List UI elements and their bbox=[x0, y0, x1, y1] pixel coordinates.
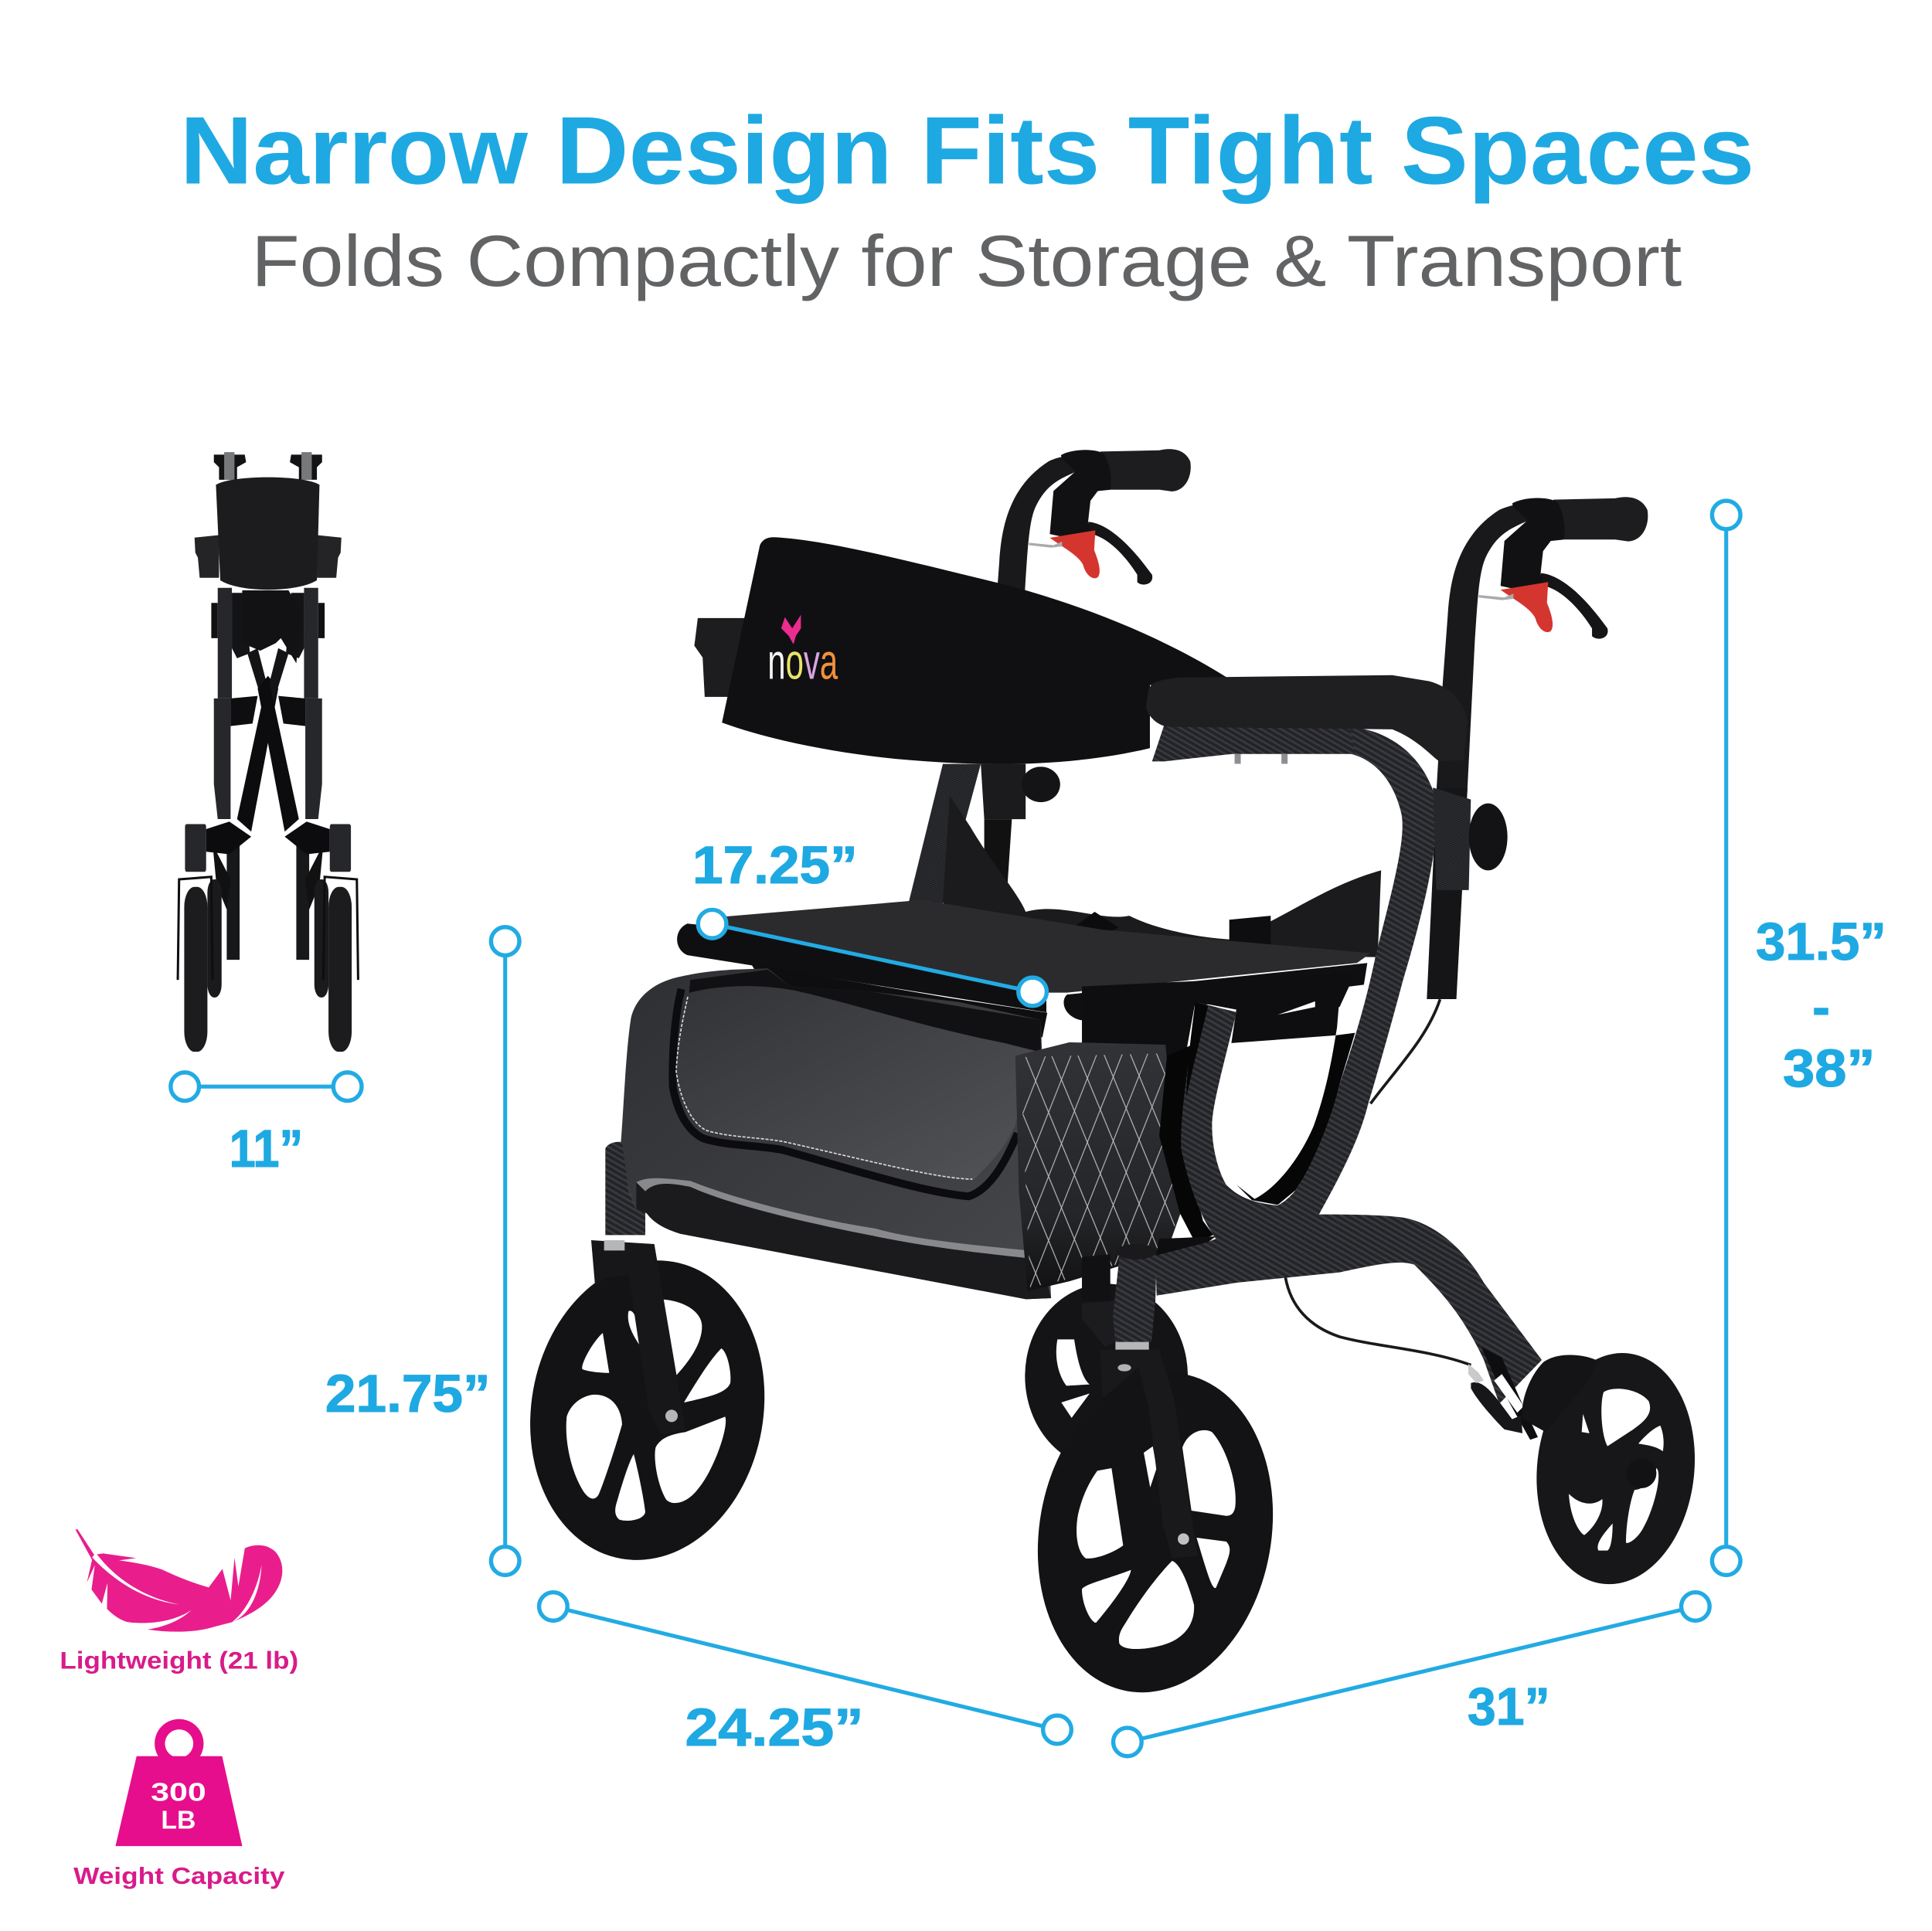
seat bbox=[677, 900, 1371, 1020]
frame shadow beside bag bbox=[1159, 1045, 1213, 1243]
under-seat shadow over bag bbox=[752, 964, 1047, 1037]
left front wheel bbox=[507, 1240, 787, 1579]
logo butterfly bbox=[781, 615, 801, 644]
rear handle and brake bbox=[988, 449, 1191, 735]
bag bottom panel bbox=[636, 1182, 1051, 1299]
back support uprights and sling bbox=[908, 764, 1381, 957]
label 24.25 in: 24.25” bbox=[685, 1698, 864, 1757]
label 31 in: 31” bbox=[1468, 1677, 1550, 1736]
side quilted panel bbox=[1015, 1042, 1180, 1291]
brake housing bbox=[1522, 1355, 1596, 1432]
front flap bbox=[676, 986, 1036, 1180]
logo wordmark: nova bbox=[767, 633, 838, 689]
folded backrest band bbox=[216, 478, 319, 590]
bag body bbox=[621, 968, 1051, 1299]
dark fill below bag panel bbox=[1155, 1236, 1216, 1258]
front handle and brake bbox=[1436, 497, 1648, 796]
zipper band bbox=[672, 989, 1018, 1196]
label: lightweight: Lightweight (21 lb) bbox=[60, 1647, 298, 1674]
dimension: overall depth 31 in bbox=[1114, 1593, 1709, 1756]
label: weight capacity: Weight Capacity bbox=[73, 1863, 284, 1889]
icon: feather bbox=[76, 1529, 282, 1632]
frame body bbox=[1155, 726, 1542, 1404]
brake cables bbox=[1285, 999, 1471, 1365]
label 21.75 in: 21.75” bbox=[325, 1364, 491, 1423]
brake tube and grip bbox=[1481, 1347, 1538, 1440]
carbon arm bbox=[1152, 724, 1355, 761]
under-seat black frame bbox=[1082, 974, 1355, 1059]
lightweight feature bbox=[60, 1529, 298, 1674]
left fork bbox=[591, 1240, 685, 1435]
front handle lower post bbox=[1427, 788, 1468, 999]
label 17.25 in: 17.25” bbox=[692, 835, 858, 895]
hidden rear wheel bbox=[1025, 1283, 1188, 1469]
rear right wheel and brake bbox=[1468, 1345, 1706, 1592]
frame inner black band bbox=[1221, 1033, 1355, 1205]
frame gloss bbox=[1186, 1002, 1208, 1097]
icon: weight: 300 bbox=[151, 1778, 206, 1807]
front wheel bbox=[1013, 1350, 1298, 1712]
dimension: seat width 17.25 in bbox=[692, 835, 1046, 1006]
dimension: overall width 24.25 in bbox=[539, 1593, 1071, 1757]
weight capacity feature bbox=[73, 1719, 284, 1889]
dimension: seat height 21.75 in bbox=[325, 927, 519, 1575]
storage bag bbox=[605, 968, 1051, 1299]
wheel bbox=[1526, 1345, 1706, 1592]
arm bolts bbox=[1235, 754, 1287, 764]
armrest pad bbox=[1146, 675, 1468, 761]
dimension: handle height 31.5 to 38 in bbox=[1712, 501, 1886, 1575]
main rollator photo illustration bbox=[60, 449, 1886, 1889]
label dash: - bbox=[1812, 977, 1830, 1037]
quilted diamond stitching bbox=[1020, 1053, 1179, 1287]
folded walker left half bbox=[178, 452, 278, 1052]
nova logo bbox=[767, 615, 838, 689]
front post tube and bag clip bbox=[1082, 1244, 1157, 1350]
title: Narrow Design Fits Tight Spaces bbox=[180, 97, 1754, 205]
dimension: folded width 11 in bbox=[171, 1073, 362, 1178]
icon: weight bbox=[115, 1719, 242, 1846]
bag upper gusset bbox=[689, 970, 1041, 1053]
rear left post bbox=[605, 1142, 645, 1235]
label 38 in: 38” bbox=[1783, 1039, 1876, 1098]
folded walker right half bbox=[257, 452, 358, 1052]
front fork bbox=[1100, 1350, 1198, 1559]
carbon main frame bbox=[1155, 726, 1542, 1404]
reflective strip bbox=[636, 1178, 1041, 1260]
height clamp and adjustment knob bbox=[1433, 787, 1508, 890]
label 31.5 in: 31.5” bbox=[1756, 912, 1886, 971]
flap stitching bbox=[676, 997, 972, 1179]
folded seat sling bbox=[242, 590, 301, 663]
icon: weight: LB bbox=[161, 1806, 196, 1834]
label 11 in: 11” bbox=[230, 1119, 303, 1178]
backrest cushion bbox=[694, 537, 1233, 764]
folded walker photo illustration bbox=[178, 452, 358, 1052]
subtitle: Folds Compactly for Storage & Transport bbox=[251, 220, 1682, 301]
